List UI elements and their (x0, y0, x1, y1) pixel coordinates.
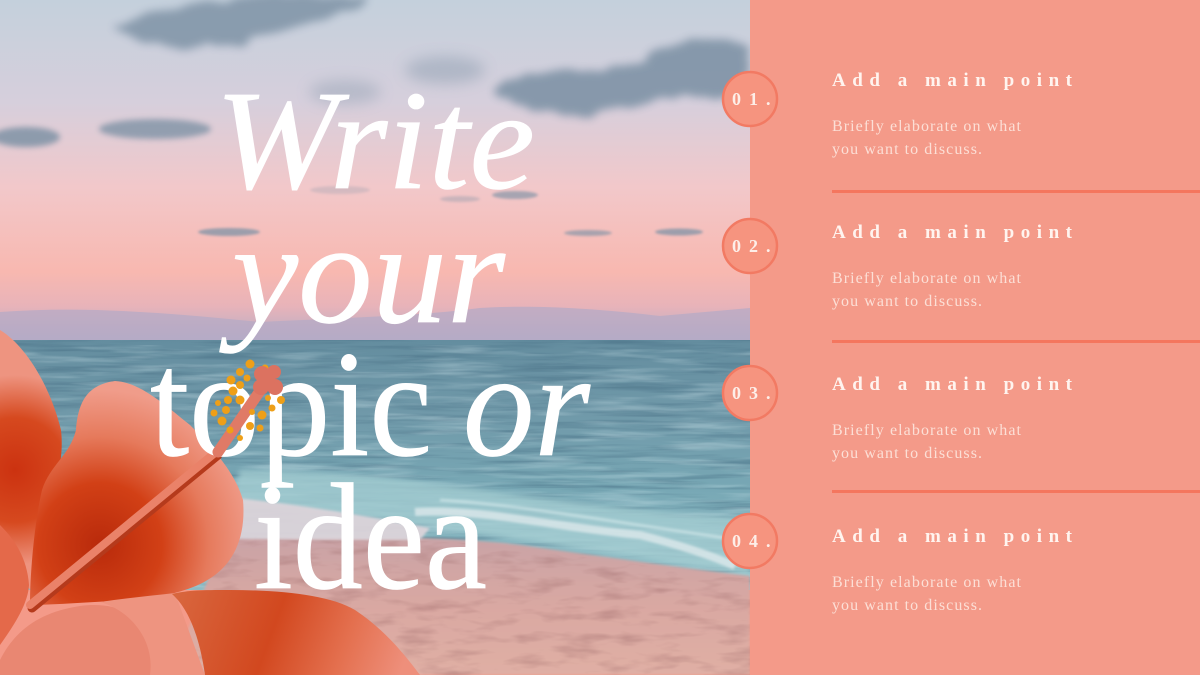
pollen dots (210, 360, 285, 441)
title: Write your topic or idea: or (463, 322, 591, 488)
badge 03 (723, 366, 778, 420)
petal: bottom left (0, 605, 155, 675)
description 04 (832, 574, 1022, 614)
petal: bottom middle (100, 593, 205, 675)
badge 03: 03. (732, 383, 778, 403)
description 04: you want to discuss. (832, 597, 982, 614)
heading 02: Add a main point (832, 222, 1073, 243)
description 03 (832, 422, 1022, 462)
title: Write your topic or idea: topic (150, 320, 432, 488)
description 03: you want to discuss. (832, 445, 982, 462)
title: Write your topic or idea: Write (215, 61, 535, 219)
badge 02 (723, 219, 778, 273)
flower stamen over the title (210, 360, 285, 452)
badge 04 (723, 514, 778, 568)
title: Write your topic or idea (150, 61, 591, 621)
heading 03: Add a main point (832, 374, 1073, 395)
title: Write your topic or idea: your (219, 194, 506, 354)
waves and foam (230, 470, 750, 575)
heading 04: Add a main point (832, 526, 1073, 547)
description 02: you want to discuss. (832, 293, 982, 310)
distant hills on the horizon (0, 306, 750, 334)
heading 01: Add a main point (832, 70, 1073, 91)
petal: centre (30, 381, 243, 605)
stigma (253, 365, 283, 395)
petal: bottom right (172, 590, 420, 675)
description 01 (832, 118, 1022, 158)
point 03 (723, 366, 1073, 462)
flower petals (0, 330, 420, 675)
badge 04: 04. (732, 531, 778, 551)
badge 01 (723, 72, 778, 126)
point 02 (723, 219, 1073, 310)
description 01: you want to discuss. (832, 141, 982, 158)
title: Write your topic or idea: idea (254, 453, 487, 621)
right panel (750, 0, 1200, 675)
clouds in the sky (0, 0, 750, 236)
foam edge on the shore (212, 498, 430, 540)
description 02: Briefly elaborate on what (832, 270, 1022, 287)
badge 02: 02. (732, 236, 778, 256)
petal: lower left (0, 525, 29, 645)
background photo: beach at sunset (0, 0, 750, 675)
point 01 (723, 70, 1073, 158)
description 01: Briefly elaborate on what (832, 118, 1022, 135)
description 03: Briefly elaborate on what (832, 422, 1022, 439)
badge 01: 01. (732, 89, 778, 109)
sand texture and footprints (170, 540, 750, 675)
description 02 (832, 270, 1022, 310)
description 04: Briefly elaborate on what (832, 574, 1022, 591)
point 04 (723, 514, 1073, 614)
stem of stamen (30, 452, 218, 608)
sea (0, 340, 750, 590)
petal: upper left (0, 330, 62, 590)
beach sand (170, 537, 750, 675)
sea ripples (0, 340, 750, 590)
